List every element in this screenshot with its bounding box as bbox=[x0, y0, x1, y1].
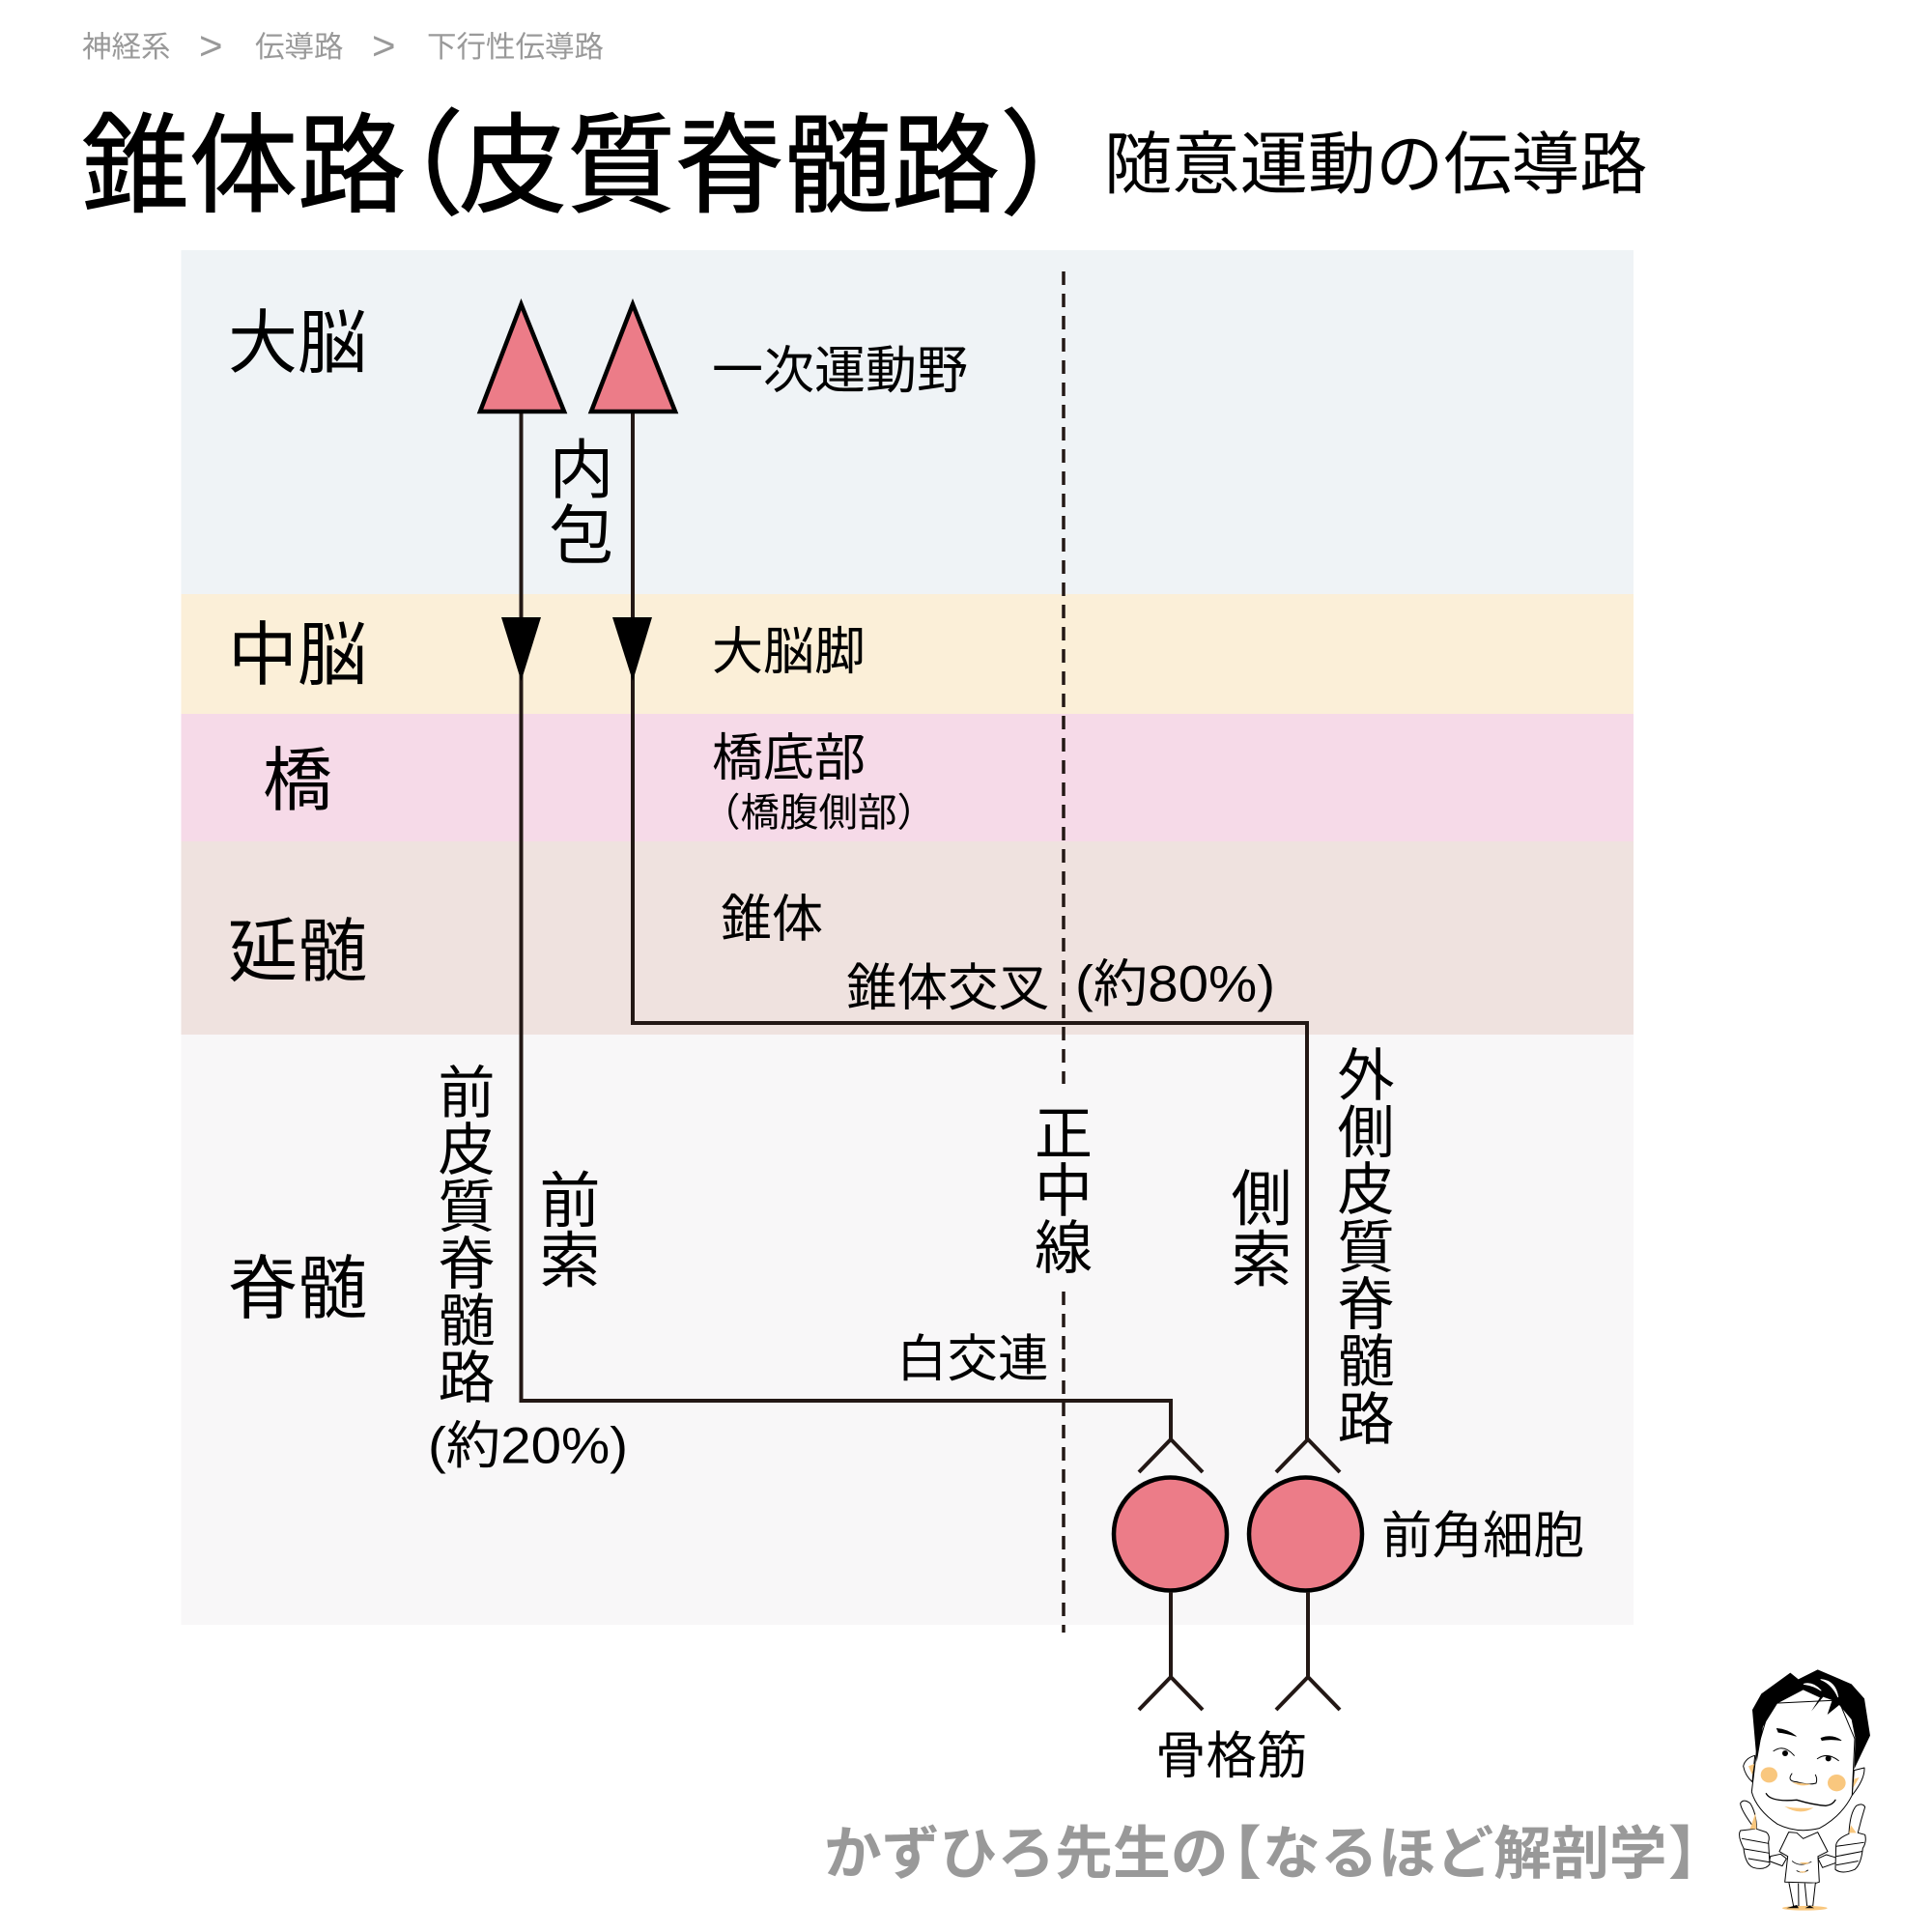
right hand bbox=[1835, 1804, 1865, 1872]
title: 皮質脊髄路 bbox=[459, 106, 1000, 226]
mouth bbox=[1766, 1794, 1835, 1805]
region labels: 中脳 bbox=[228, 617, 367, 695]
vertical label: anterior corticospinal tract: 路 bbox=[438, 1347, 496, 1410]
structure labels: (約20%) bbox=[428, 1418, 628, 1474]
hair bbox=[1752, 1669, 1870, 1770]
anterior tract pathway bbox=[522, 412, 1171, 1439]
footer credit: かずひろ先生の bbox=[824, 1822, 1229, 1886]
breadcrumb: 下行性伝導路 bbox=[427, 31, 604, 64]
structure labels: 大脳脚 bbox=[712, 624, 866, 680]
vertical label: lateral corticospinal tract: 路 bbox=[1337, 1388, 1395, 1452]
lateral tract pathway bbox=[633, 412, 1307, 1439]
vertical label: midline: 線 bbox=[1035, 1215, 1093, 1281]
band: spinal cord bbox=[182, 1035, 1634, 1625]
vertical label: anterior funiculus: 索 bbox=[539, 1228, 601, 1295]
vertical label: lateral corticospinal tract: 脊 bbox=[1337, 1273, 1395, 1337]
title bbox=[81, 102, 1114, 230]
synapse forks upper bbox=[1139, 1439, 1340, 1472]
ears bbox=[1744, 1755, 1864, 1795]
midline dashed line bbox=[1062, 271, 1065, 1633]
region labels: 橋 bbox=[263, 743, 332, 820]
vertical label: anterior funiculus: 前 bbox=[539, 1168, 601, 1236]
title: （ bbox=[350, 102, 464, 230]
vertical label: lateral funiculus: 側 bbox=[1231, 1166, 1293, 1234]
vertical label: anterior corticospinal tract: 質 bbox=[438, 1176, 496, 1239]
structure labels: 骨格筋 bbox=[1155, 1727, 1308, 1785]
breadcrumb bbox=[82, 23, 604, 68]
eyes bbox=[1774, 1748, 1838, 1761]
vertical label: lateral corticospinal tract: 側 bbox=[1337, 1101, 1395, 1165]
legs and feet bbox=[1789, 1883, 1815, 1906]
region labels bbox=[228, 305, 367, 1328]
vertical label: midline: 中 bbox=[1035, 1159, 1093, 1223]
vertical label: lateral funiculus: 索 bbox=[1231, 1227, 1293, 1294]
band: medulla bbox=[182, 841, 1634, 1035]
footer credit bbox=[824, 1822, 1726, 1886]
region labels: 延髄 bbox=[228, 914, 367, 991]
icon: cartoon doctor giving thumbs up bbox=[1740, 1669, 1870, 1911]
breadcrumb: 神経系 bbox=[82, 31, 170, 64]
breadcrumb: 伝導路 bbox=[255, 31, 344, 64]
upper motor neuron triangles bbox=[480, 304, 675, 412]
region labels: 大脳 bbox=[228, 305, 367, 383]
vertical label: lateral corticospinal tract: 皮 bbox=[1337, 1158, 1395, 1222]
band: pons bbox=[182, 714, 1634, 841]
brows bbox=[1776, 1728, 1841, 1741]
vertical label: internal capsule: 内 bbox=[549, 435, 614, 506]
vertical label: anterior corticospinal tract: 皮 bbox=[438, 1119, 496, 1182]
breadcrumb: > bbox=[199, 23, 223, 68]
vertical label: midline: 正 bbox=[1035, 1101, 1093, 1167]
structure labels: 一次運動野 bbox=[712, 342, 968, 400]
structure labels: (約80%) bbox=[1075, 956, 1275, 1012]
body bbox=[1779, 1833, 1828, 1883]
descending arrowheads bbox=[501, 617, 652, 681]
vertical label: lateral corticospinal tract: 外 bbox=[1337, 1044, 1395, 1108]
breadcrumb: > bbox=[372, 23, 396, 68]
motor axons to muscle bbox=[1139, 1592, 1340, 1710]
pons note: （橋腹側部） bbox=[701, 790, 936, 835]
region labels: 脊髄 bbox=[228, 1251, 367, 1328]
structure labels bbox=[428, 342, 1584, 1785]
footer credit: 】 bbox=[1668, 1822, 1726, 1886]
cheeks bbox=[1761, 1767, 1777, 1782]
face bbox=[1751, 1700, 1855, 1831]
structure labels: 白交連 bbox=[896, 1331, 1049, 1387]
band: midbrain bbox=[182, 594, 1634, 714]
title: 錐体路 bbox=[81, 106, 406, 226]
structure labels: 前角細胞 bbox=[1381, 1507, 1584, 1565]
title: ） bbox=[1000, 102, 1114, 230]
footer credit: 【 bbox=[1204, 1822, 1262, 1886]
structure labels: 橋底部 bbox=[712, 730, 866, 786]
left hand bbox=[1740, 1801, 1770, 1868]
vertical label: anterior corticospinal tract: 前 bbox=[438, 1062, 496, 1125]
vertical label: anterior corticospinal tract: 髄 bbox=[438, 1290, 496, 1353]
band: cerebrum bbox=[182, 250, 1634, 594]
nose bbox=[1790, 1774, 1817, 1784]
arms bbox=[1770, 1854, 1837, 1867]
vertical label: lateral corticospinal tract: 髄 bbox=[1337, 1330, 1395, 1394]
vertical label: anterior corticospinal tract: 脊 bbox=[438, 1233, 496, 1296]
vertical label: lateral corticospinal tract: 質 bbox=[1337, 1216, 1395, 1280]
structure labels: 錐体交叉 bbox=[846, 960, 1049, 1016]
footer credit: なるほど解剖学 bbox=[1263, 1822, 1667, 1886]
structure labels: 錐体 bbox=[721, 891, 823, 949]
subtitle: 随意運動の伝導路 bbox=[1104, 126, 1647, 203]
vertical label: internal capsule: 包 bbox=[549, 500, 614, 572]
anterior horn cells bbox=[1114, 1478, 1362, 1590]
